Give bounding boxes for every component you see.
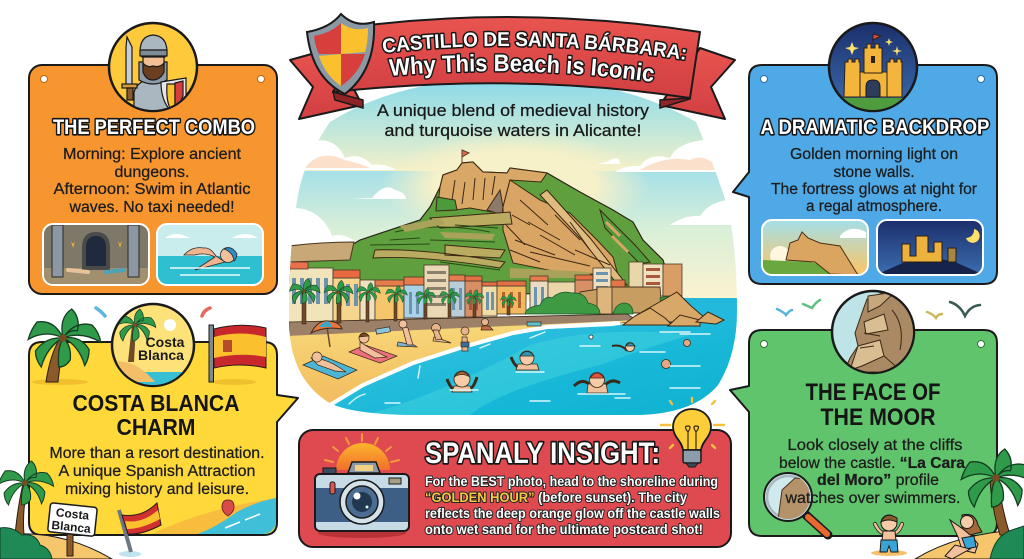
ribbon tail left (290, 48, 362, 119)
icon: costa blanca badge: Blanca (138, 347, 184, 363)
heading: THE FACE OF (806, 379, 940, 406)
thumbnail: swimmer (157, 224, 263, 285)
icon: rock face badge (832, 290, 918, 373)
old wall left (289, 242, 354, 262)
sign: Blanca (51, 518, 92, 536)
body text (54, 146, 251, 216)
body text: a regal atmosphere. (806, 198, 942, 215)
subtitle: A unique blend of medieval history (377, 101, 650, 120)
body text: Golden morning light on (790, 146, 958, 163)
central beach illustration (285, 75, 741, 420)
body text: Morning: Explore ancient (63, 146, 242, 163)
panel: the perfect combo (29, 23, 277, 294)
panel rivets (40, 76, 264, 82)
icon: birds (777, 300, 980, 318)
icon: heraldic shield (307, 14, 374, 94)
panel: costa blanca charm (29, 304, 298, 535)
icon: small spanish flag (119, 503, 161, 557)
bushes (525, 292, 682, 314)
rocks (623, 292, 724, 326)
panel card (299, 430, 731, 547)
body text: onto wet sand for the ultimate postcard shot! (425, 522, 703, 537)
swimmers (447, 335, 690, 393)
body text: waves. No taxi needed! (68, 199, 234, 216)
icon: confetti arcs (96, 308, 210, 316)
thumbnail: castle at night (877, 220, 983, 275)
icon: palm and beach right (915, 449, 1024, 559)
panel: a dramatic backdrop (733, 23, 997, 284)
body text: dungeons. (114, 164, 190, 181)
subtitle: and turquoise waters in Alicante! (384, 121, 642, 140)
body text: del Moro” profile (817, 472, 939, 489)
clouds (285, 139, 740, 245)
heading: COSTA BLANCA (72, 390, 240, 416)
icon: island with palm, sign and flag (0, 461, 112, 559)
body text: reflects the deep orange glow off the castle walls (425, 506, 720, 521)
body text (779, 437, 965, 507)
icon: castle badge (828, 23, 918, 115)
body text: “GOLDEN HOUR” (before sunset). The city (425, 490, 687, 505)
sunbathers (303, 318, 541, 379)
panel card (29, 65, 277, 294)
body text: stone walls. (834, 164, 914, 181)
body text: watches over swimmers. (784, 490, 960, 507)
heading: A DRAMATIC BACKDROP (760, 116, 990, 139)
title banner (289, 16, 736, 120)
beach corner (150, 498, 276, 535)
body text (425, 474, 720, 537)
icon: costa blanca badge (112, 304, 194, 392)
heading (806, 379, 940, 431)
thumbnail: dungeon (43, 224, 149, 285)
mountain: tan rocks and castle (370, 162, 650, 285)
heading (72, 390, 240, 440)
icon: boy on beach (871, 515, 907, 556)
heading: CHARM (116, 414, 196, 440)
fort wall (580, 287, 662, 314)
icon: spanish flag (209, 325, 266, 385)
sea horizon (684, 298, 737, 338)
title text lines (383, 46, 686, 60)
sign (48, 503, 97, 556)
ribbon main band (333, 17, 700, 98)
heading: THE PERFECT COMBO (53, 116, 255, 139)
small palm (15, 484, 28, 535)
title banner: CASTILLO DE SANTA BÁRBARA: (382, 30, 688, 62)
sky (285, 75, 741, 301)
ribbon folds (333, 92, 690, 108)
flag on castle (462, 150, 469, 163)
subtitle (377, 101, 650, 140)
panel card with tail (29, 342, 298, 535)
icon: light bulb (661, 398, 724, 467)
palms row (289, 279, 516, 324)
icon: large palm left (28, 309, 101, 385)
panel card with tail (730, 330, 997, 536)
bush (0, 528, 52, 559)
body text: Afternoon: Swim in Atlantic (54, 181, 251, 198)
icon: map pin (222, 500, 234, 516)
heading: THE MOOR (820, 404, 936, 431)
beach sand (290, 320, 628, 404)
icon: girl on beach (945, 514, 982, 559)
body text (50, 445, 264, 498)
icon: knight badge (109, 23, 197, 112)
island sand (0, 534, 112, 559)
building windows (292, 268, 660, 314)
panel rivets (760, 76, 984, 82)
body text: For the BEST photo, head to the shoreline during (425, 474, 718, 489)
beach umbrella (311, 321, 342, 347)
sign: Costa (55, 505, 90, 523)
panel: the face of the moor (730, 290, 997, 536)
thumbnail: castle at dawn (762, 220, 868, 280)
heading: SPANALY INSIGHT: (425, 437, 660, 470)
body text: The fortress glows at night for (771, 181, 977, 198)
wave highlights (349, 332, 710, 404)
icon: magnifying glass (764, 473, 828, 535)
panel rivets (760, 340, 984, 348)
body text: below the castle. “La Cara (779, 455, 965, 472)
promenade (289, 314, 640, 337)
title banner: Why This Beach is Iconic (387, 52, 656, 83)
body text: mixing history and leisure. (65, 481, 249, 498)
panel: spanaly insight (299, 430, 731, 547)
body text: Look closely at the cliffs (788, 437, 963, 454)
buildings (288, 262, 682, 324)
body text (771, 146, 977, 215)
body text: A unique Spanish Attraction (58, 463, 256, 480)
panel card with tail (733, 65, 997, 284)
body text: More than a resort destination. (50, 445, 264, 462)
badge label: Costa (146, 334, 185, 350)
mountain: green base (290, 162, 672, 300)
water (330, 320, 740, 420)
icon: sun and camera (315, 434, 409, 538)
ribbon tail right (660, 48, 735, 119)
